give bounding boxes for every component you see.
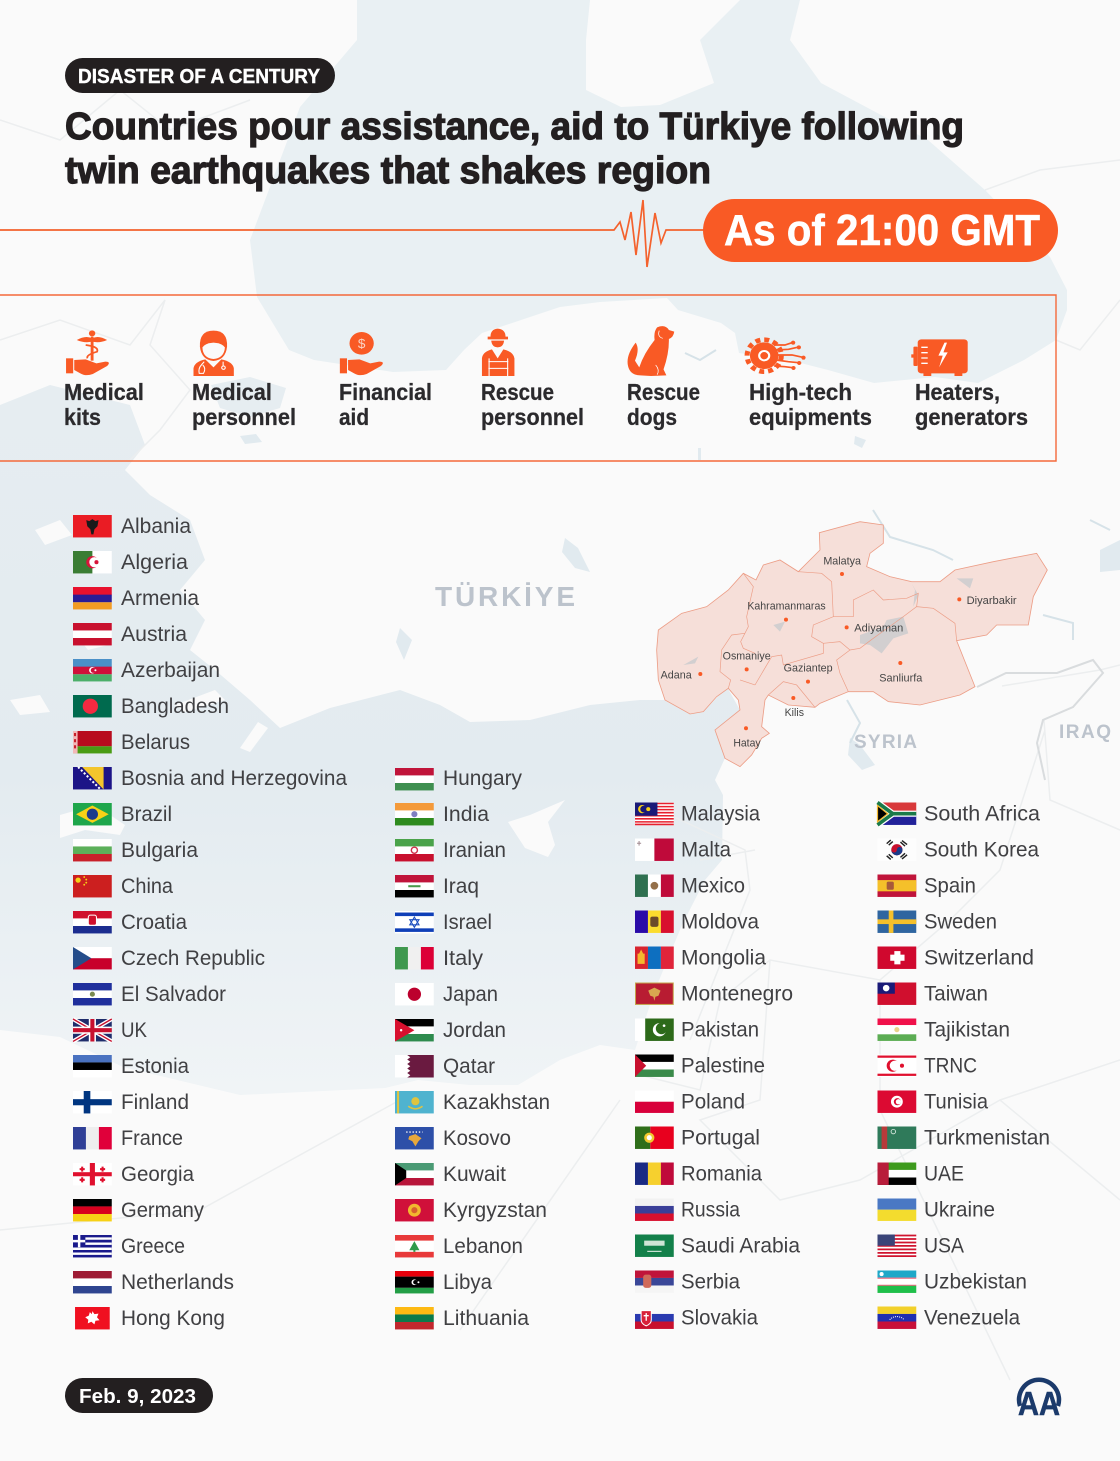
country list: column 1	[73, 515, 347, 1330]
country: Bosnia and Herzegovina: Bosnia and Herzegovina	[121, 767, 347, 790]
country: Bulgaria	[73, 839, 198, 862]
country: Kuwait: Kuwait	[443, 1163, 506, 1186]
country: Azerbaijan: Azerbaijan	[121, 659, 220, 682]
country: TRNC	[878, 1054, 977, 1078]
country: Greece	[73, 1235, 185, 1258]
dam lakes	[683, 578, 973, 665]
country: Jordan	[395, 1019, 506, 1042]
country: USA	[878, 1234, 964, 1258]
date badge: Feb. 9, 2023	[79, 1386, 196, 1408]
country: Serbia	[635, 1270, 740, 1294]
country: Georgia: Georgia	[121, 1163, 194, 1186]
country: Germany: Germany	[121, 1199, 204, 1222]
country: Portugal: Portugal	[681, 1126, 760, 1150]
country: El Salvador	[73, 983, 226, 1006]
country: Tajikistan: Tajikistan	[924, 1018, 1010, 1042]
country: El Salvador: El Salvador	[121, 983, 226, 1006]
country: Armenia	[73, 587, 199, 610]
panel: aid types	[0, 295, 1056, 461]
country: Slovakia: Slovakia	[681, 1306, 758, 1330]
country: South Africa	[878, 802, 1040, 826]
country: Azerbaijan	[73, 659, 220, 682]
country: China	[73, 875, 173, 898]
country list: column 2	[395, 767, 550, 1330]
country: Libya: Libya	[443, 1271, 492, 1294]
map label: Syria: SYRIA	[854, 732, 917, 753]
icon: medical kits	[66, 330, 109, 375]
city labels: Adiyaman	[854, 623, 903, 635]
time badge: as of 21:00 GMT: As of 21:00 GMT	[724, 206, 1040, 255]
lakes	[240, 434, 1120, 770]
country: Italy: Italy	[443, 947, 484, 970]
country: Malta	[635, 838, 731, 862]
title: Countries pour assistance, aid to Türkiye following	[65, 106, 964, 148]
country: Tunisia: Tunisia	[924, 1090, 988, 1114]
country: TRNC: TRNC	[924, 1054, 977, 1078]
country: Germany	[73, 1199, 204, 1222]
country: South Korea: South Korea	[924, 838, 1039, 862]
icon: medical personnel	[193, 331, 234, 376]
country: South Africa: South Africa	[924, 802, 1040, 826]
icon: rescue personnel	[482, 329, 514, 376]
mediterranean sea	[0, 385, 740, 1095]
country: Spain: Spain	[924, 874, 976, 898]
label: high-tech equipments: equipments	[749, 404, 872, 430]
country: Mongolia	[635, 946, 766, 970]
city labels	[661, 555, 1017, 750]
marmara sea	[211, 377, 286, 417]
label: rescue dogs: dogs	[627, 404, 677, 430]
icon: high-tech gear	[747, 340, 806, 372]
country: Armenia: Armenia	[121, 587, 199, 610]
country: Spain	[878, 874, 976, 898]
country: Montenegro: Montenegro	[681, 982, 793, 1006]
country: Uzbekistan	[878, 1270, 1027, 1294]
country: Austria: Austria	[121, 623, 187, 646]
rivers	[685, 350, 1110, 743]
country: Poland: Poland	[681, 1090, 745, 1114]
country: Kyrgyzstan: Kyrgyzstan	[443, 1199, 547, 1222]
country: Venezuela	[878, 1306, 1020, 1330]
item: rescue personnel	[481, 329, 584, 430]
country: Hong Kong: Hong Kong	[121, 1307, 225, 1330]
country: UK: UK	[121, 1019, 147, 1042]
label: medical personnel: personnel	[192, 404, 296, 430]
country: Japan: Japan	[443, 983, 498, 1006]
city labels: Hatay	[733, 738, 761, 750]
country: Iranian	[395, 839, 506, 862]
country: Belarus: Belarus	[121, 731, 190, 754]
label: rescue personnel: personnel	[481, 404, 584, 430]
city labels: Sanliurfa	[879, 673, 923, 685]
country: Brazil: Brazil	[121, 803, 172, 826]
country: Palestine: Palestine	[681, 1054, 765, 1078]
country: Albania: Albania	[121, 515, 191, 538]
label: heaters, generators: generators	[915, 404, 1028, 430]
country: Croatia	[73, 911, 187, 934]
country: Kosovo	[395, 1127, 511, 1150]
black sea	[250, 0, 1067, 383]
country: Lithuania: Lithuania	[443, 1307, 529, 1330]
country: Brazil	[73, 803, 172, 826]
icon: financial aid: $	[358, 336, 366, 351]
label: rescue personnel	[481, 379, 584, 430]
label: financial aid: aid	[339, 404, 369, 430]
country: Ukraine: Ukraine	[924, 1198, 995, 1222]
item: high-tech equipments	[747, 340, 872, 430]
country: Tajikistan	[878, 1018, 1010, 1042]
country: Greece: Greece	[121, 1235, 185, 1258]
country: Poland	[635, 1090, 745, 1114]
country: Lebanon: Lebanon	[443, 1235, 523, 1258]
logo: Anadolu Agency: AA	[1018, 1385, 1060, 1422]
country: Malta: Malta	[681, 838, 731, 862]
country: Kyrgyzstan	[395, 1199, 547, 1222]
label: heaters, generators	[915, 379, 1028, 430]
country: Lebanon	[395, 1235, 523, 1258]
country: Qatar	[395, 1055, 495, 1078]
label: high-tech equipments	[749, 379, 872, 430]
item: heaters, generators	[911, 339, 1028, 430]
item: medical personnel	[192, 331, 296, 430]
city labels: Osmaniye	[723, 650, 771, 662]
country: Kazakhstan	[395, 1091, 550, 1114]
country: Israel	[395, 911, 492, 934]
country: Iranian: Iranian	[443, 839, 506, 862]
country: Bangladesh	[73, 695, 229, 718]
seismic wave line	[0, 200, 704, 267]
country: Switzerland: Switzerland	[924, 946, 1034, 970]
label: rescue personnel: Rescue	[481, 379, 554, 405]
country: Hungary	[395, 767, 522, 790]
country: Finland: Finland	[121, 1091, 189, 1114]
country: Palestine	[635, 1054, 765, 1078]
country: Sweden	[878, 910, 997, 934]
country: Libya	[395, 1271, 492, 1294]
country: Mexico	[635, 874, 745, 898]
country: Kosovo: Kosovo	[443, 1127, 511, 1150]
city labels: Kahramanmaras	[747, 600, 826, 612]
country: UAE	[878, 1162, 964, 1186]
country: Algeria: Algeria	[121, 551, 188, 574]
country: Romania: Romania	[681, 1162, 762, 1186]
city labels: Diyarbakir	[967, 595, 1017, 607]
icon: generator	[911, 339, 968, 376]
country: Mongolia: Mongolia	[681, 946, 766, 970]
city labels: Gaziantep	[784, 663, 833, 675]
country: Netherlands: Netherlands	[121, 1271, 234, 1294]
country: India	[395, 803, 489, 826]
country: Romania	[635, 1162, 762, 1186]
country: China: China	[121, 875, 173, 898]
country: Qatar: Qatar	[443, 1055, 495, 1078]
country: Hungary: Hungary	[443, 767, 522, 790]
label: medical personnel	[192, 379, 296, 430]
title: twin earthquakes that shakes region	[65, 150, 711, 192]
country: Hong Kong	[75, 1307, 225, 1330]
country: Italy	[395, 947, 484, 970]
item: medical kits	[64, 330, 144, 430]
country: Tunisia	[878, 1090, 988, 1114]
country: Bulgaria: Bulgaria	[121, 839, 198, 862]
country: Bangladesh: Bangladesh	[121, 695, 229, 718]
label: medical kits: Medical	[64, 379, 144, 405]
islands	[10, 520, 565, 857]
country: Jordan: Jordan	[443, 1019, 506, 1042]
country: Taiwan	[878, 982, 988, 1006]
country: Moldova	[635, 910, 759, 934]
country: Saudi Arabia: Saudi Arabia	[681, 1234, 800, 1258]
label: financial aid	[339, 379, 432, 430]
badge: disaster of a century	[65, 58, 335, 93]
country: Russia: Russia	[681, 1198, 740, 1222]
country: Japan	[395, 983, 498, 1006]
country: Lithuania	[395, 1307, 529, 1330]
country: USA: USA	[924, 1234, 964, 1258]
country: France	[73, 1127, 183, 1150]
country: Austria	[73, 623, 187, 646]
country: Switzerland	[878, 946, 1034, 970]
country: France: France	[121, 1127, 183, 1150]
country list: column 4	[878, 802, 1050, 1330]
city labels: Adana	[661, 669, 693, 681]
country: Algeria	[73, 551, 188, 574]
country: Malaysia: Malaysia	[681, 802, 760, 826]
label: rescue dogs: Rescue	[627, 379, 700, 405]
country: Kazakhstan: Kazakhstan	[443, 1091, 550, 1114]
label: high-tech equipments: High-tech	[749, 379, 852, 405]
country: Belarus	[73, 731, 190, 754]
country: Georgia	[73, 1163, 194, 1186]
city labels: Malatya	[823, 555, 862, 567]
icon: rescue dogs	[628, 326, 674, 376]
country: Venezuela: Venezuela	[924, 1306, 1020, 1330]
label: financial aid: Financial	[339, 379, 432, 405]
country: Moldova: Moldova	[681, 910, 759, 934]
country: UK	[73, 1019, 147, 1042]
item: rescue dogs	[627, 326, 700, 430]
label: medical kits	[64, 379, 144, 430]
country: Ukraine	[878, 1198, 995, 1222]
country: Russia	[635, 1198, 740, 1222]
country: Czech Republic: Czech Republic	[121, 947, 265, 970]
map: affected provinces	[657, 522, 1047, 767]
map label: Iraq: IRAQ	[1059, 722, 1111, 743]
date badge	[65, 1378, 213, 1413]
country: India: India	[443, 803, 489, 826]
country: Uzbekistan: Uzbekistan	[924, 1270, 1027, 1294]
country: Serbia: Serbia	[681, 1270, 740, 1294]
city dots	[698, 572, 961, 730]
badge: disaster of a century: DISASTER OF A CENTURY	[78, 66, 321, 88]
city labels: Kilis	[785, 707, 804, 719]
label: rescue dogs	[627, 379, 700, 430]
country list: column 3	[635, 802, 800, 1330]
province borders	[720, 572, 957, 707]
country: Croatia: Croatia	[121, 911, 187, 934]
country: Estonia	[73, 1055, 189, 1078]
country: Estonia: Estonia	[121, 1055, 189, 1078]
country: Albania	[73, 515, 191, 538]
map label: Türkiye: TÜRKİYE	[435, 581, 575, 612]
title	[65, 106, 964, 192]
item: financial aid	[339, 332, 432, 430]
country: Malaysia	[635, 802, 760, 826]
label: heaters, generators: Heaters,	[915, 379, 1000, 405]
country: Iraq: Iraq	[443, 875, 479, 898]
country: Slovakia	[635, 1306, 758, 1330]
country: Finland	[73, 1091, 189, 1114]
country: Sweden: Sweden	[924, 910, 997, 934]
country: UAE: UAE	[924, 1162, 964, 1186]
country: Iraq	[395, 875, 479, 898]
country: Pakistan	[635, 1018, 759, 1042]
country: Kuwait	[395, 1163, 506, 1186]
country: Taiwan: Taiwan	[924, 982, 988, 1006]
label: medical personnel: Medical	[192, 379, 272, 405]
country: Pakistan: Pakistan	[681, 1018, 759, 1042]
country: Israel: Israel	[443, 911, 492, 934]
country: Turkmenistan: Turkmenistan	[924, 1126, 1050, 1150]
country: Portugal	[635, 1126, 760, 1150]
country: Mexico: Mexico	[681, 874, 745, 898]
label: medical kits: kits	[64, 404, 101, 430]
